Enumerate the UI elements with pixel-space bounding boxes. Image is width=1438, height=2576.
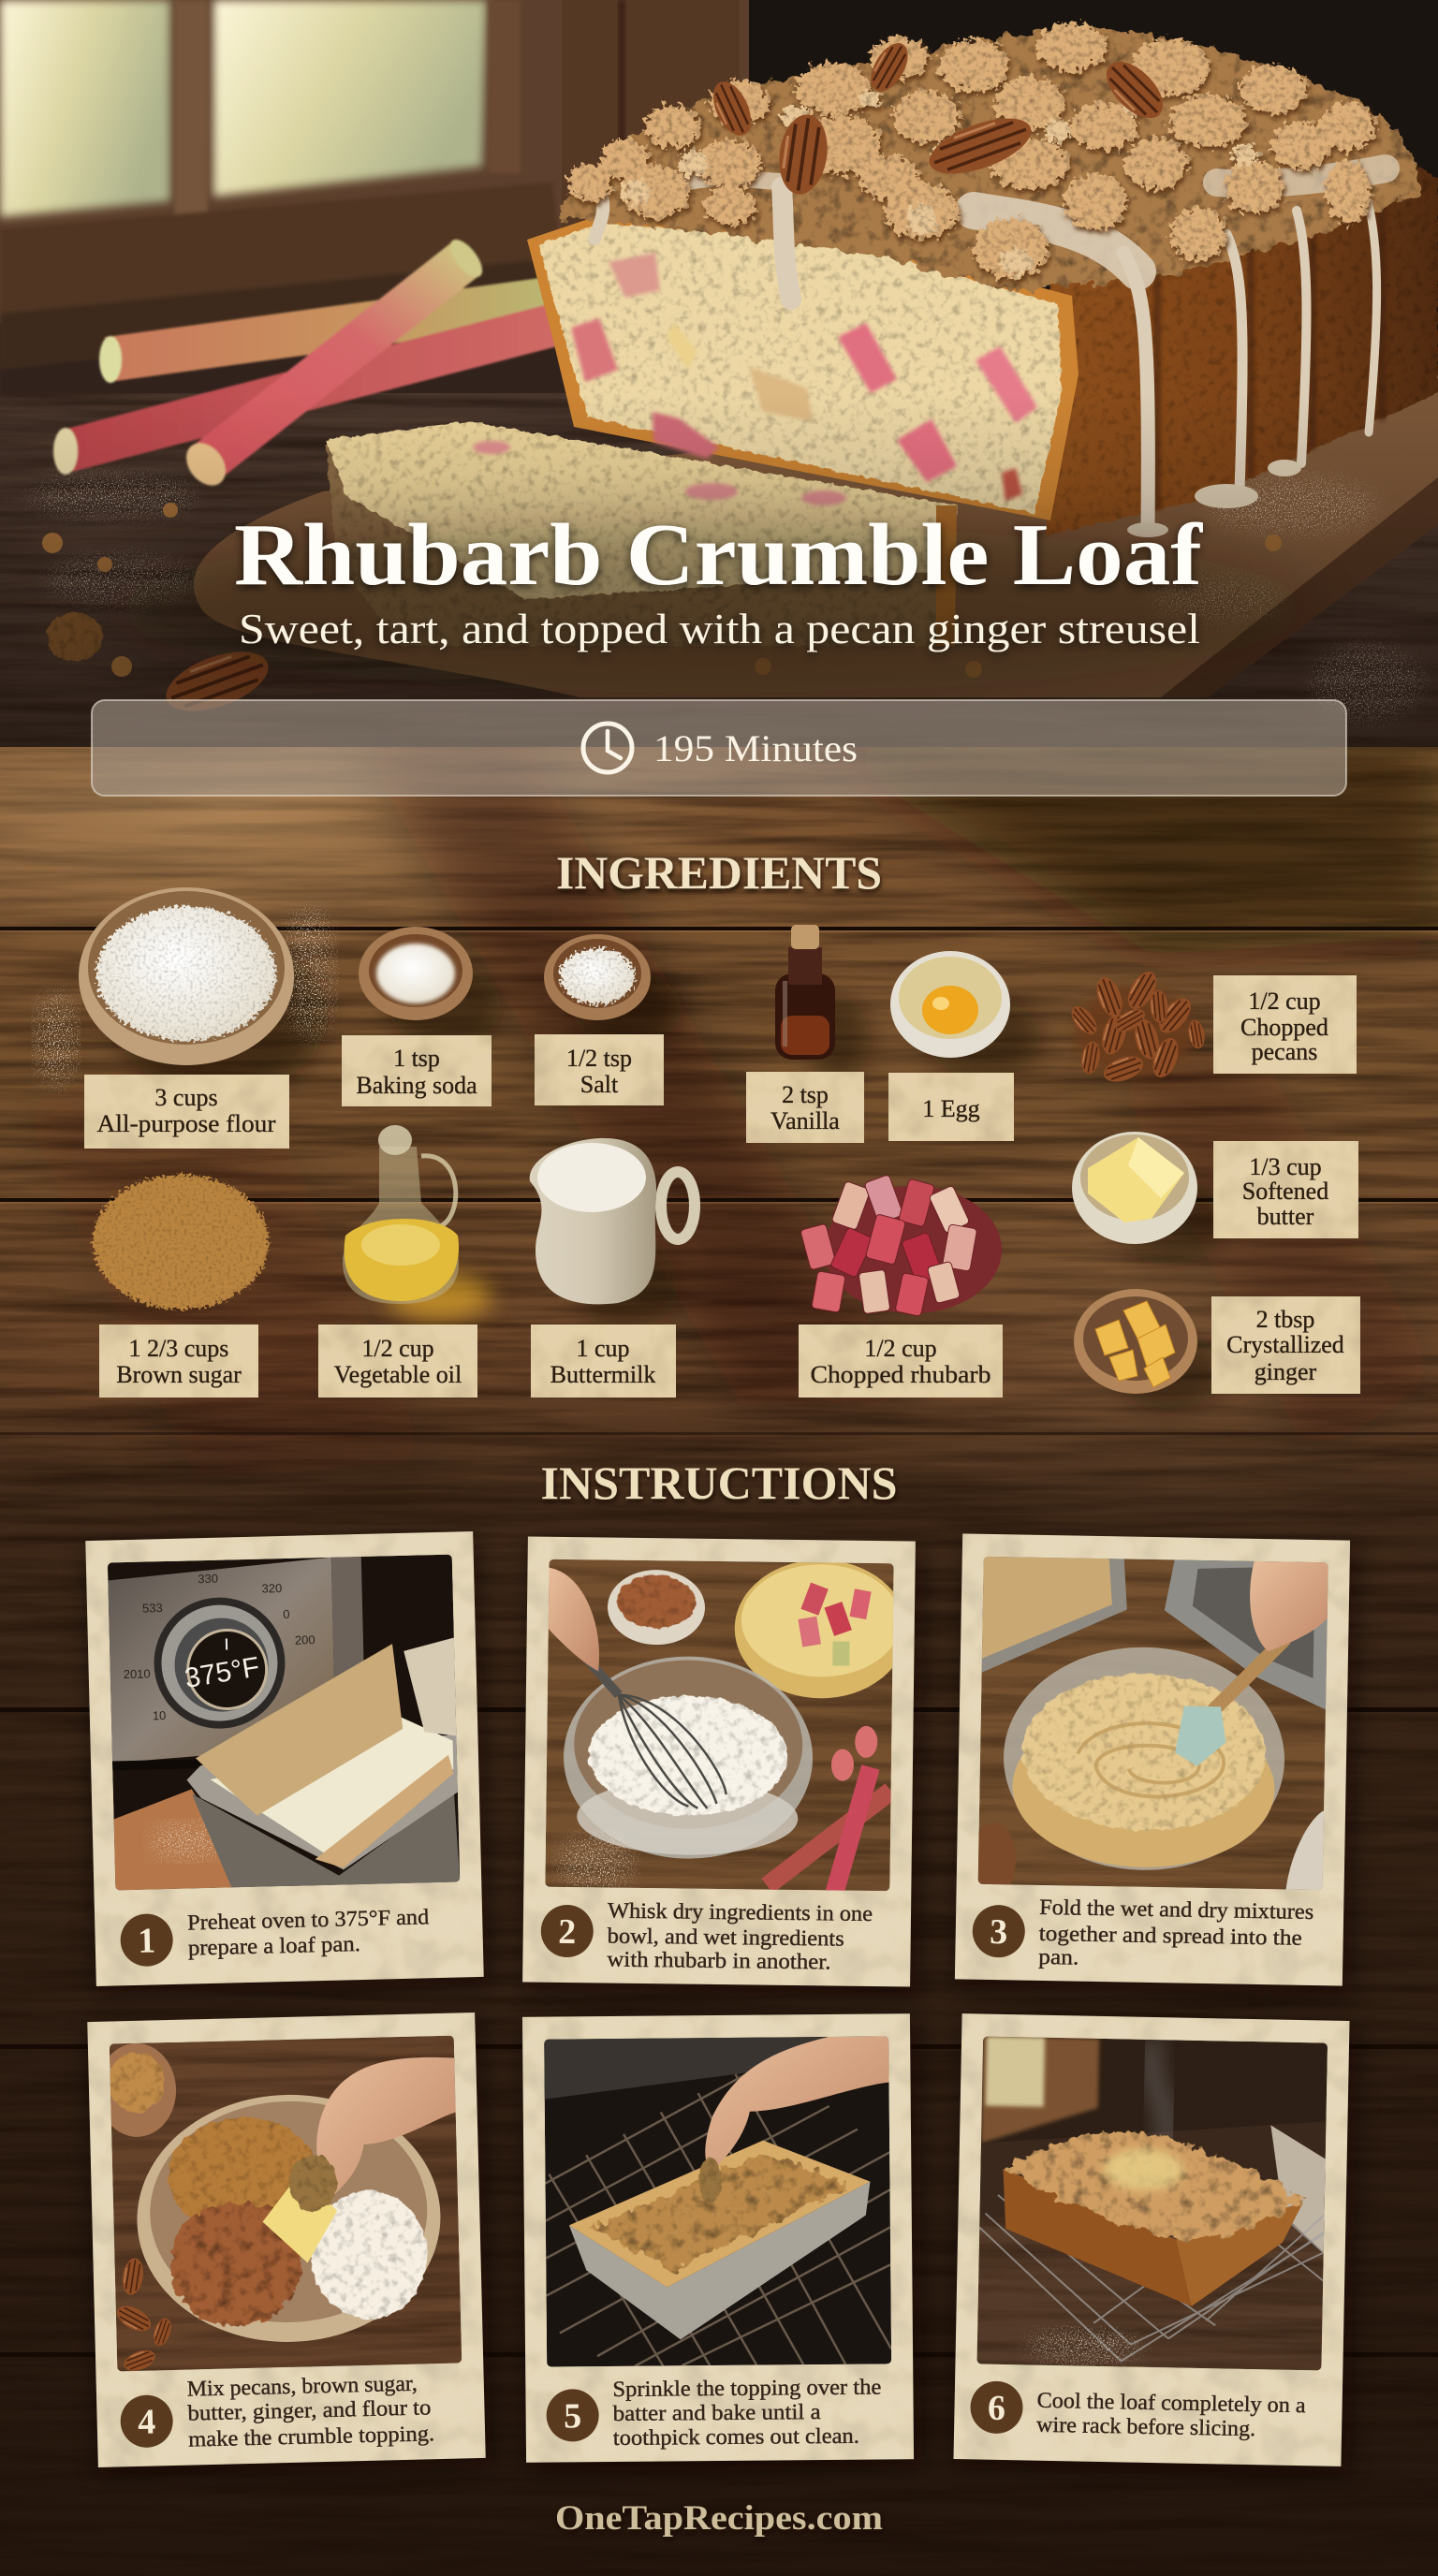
ingredient: egg in a bowl	[890, 951, 1041, 1078]
wood table background	[0, 646, 1438, 2576]
step 5 photo: sprinkling crumble in the oven	[544, 2036, 892, 2367]
step 6 number badge: 6	[988, 2389, 1005, 2428]
loaf side crust	[1047, 159, 1438, 535]
ingredient: buttermilk jug	[530, 1138, 695, 1331]
label: 2 tbsp crystallized ginger	[1211, 1296, 1360, 1394]
label: 1 tsp baking soda: 1 tsp	[393, 1045, 440, 1072]
ingredient: vegetable oil bottle	[343, 1125, 492, 1320]
label: 1/2 cup vegetable oil: 1/2 cup	[361, 1335, 434, 1362]
step 3 number badge	[972, 1905, 1025, 1958]
step 3 photo: folding batter	[970, 1557, 1332, 1903]
ingredient: vanilla bottle	[775, 925, 870, 1081]
label: 1 2/3 cups brown sugar: Brown sugar	[116, 1361, 242, 1388]
label: 1 2/3 cups brown sugar	[99, 1325, 258, 1398]
label: 1/2 tsp salt: 1/2 tsp	[566, 1045, 632, 1072]
step 1 photo: oven dial and lined pan: 200	[295, 1632, 315, 1647]
label: 2 tbsp crystallized ginger: 2 tbsp	[1256, 1306, 1314, 1333]
title: Rhubarb Crumble Loaf	[234, 506, 1204, 604]
table surface	[0, 393, 1438, 749]
step 6 text: wire rack before slicing.	[1036, 2413, 1255, 2441]
pecans on the crumble	[706, 37, 1173, 198]
crumble topping base	[559, 29, 1421, 293]
ingredient: flour bowl	[36, 887, 333, 1095]
label: 1/3 cup softened butter: 1/3 cup	[1249, 1153, 1322, 1180]
label: 2 tsp vanilla	[746, 1072, 864, 1143]
step 1 photo: oven dial and lined pan	[108, 1555, 460, 1890]
step 5 text: batter and bake until a	[613, 2400, 821, 2426]
step 3 text: pan.	[1038, 1945, 1079, 1970]
step 5 number badge: 5	[564, 2396, 581, 2436]
footer website: OneTapRecipes.com	[555, 2499, 883, 2538]
step 1 number badge: 1	[138, 1921, 156, 1961]
instructions heading: INSTRUCTIONS	[541, 1456, 897, 1509]
cut slice	[326, 421, 957, 646]
step 5 text: toothpick comes out clean.	[613, 2424, 859, 2451]
step card 3	[955, 1533, 1358, 1996]
step 2 number badge: 2	[558, 1912, 577, 1952]
label: 1/2 cup chopped pecans: pecans	[1252, 1038, 1317, 1065]
step card 1	[85, 1531, 490, 1996]
label: 1/2 cup chopped pecans: Chopped	[1240, 1014, 1328, 1041]
label: 1/2 cup chopped rhubarb: 1/2 cup	[864, 1335, 937, 1362]
scattered crumbs and pecan	[42, 503, 1282, 723]
label: 1 cup buttermilk: 1 cup	[576, 1335, 630, 1362]
loaf cut face	[527, 215, 1078, 520]
step 1 photo: oven dial and lined pan: 330	[198, 1572, 218, 1586]
step 1 text	[187, 1905, 430, 1961]
crumble lumps	[567, 22, 1376, 278]
hero vignette	[0, 393, 1438, 749]
step 1 number badge	[120, 1913, 173, 1967]
step 4 number badge: 4	[138, 2402, 156, 2442]
label: 1/3 cup softened butter: butter	[1257, 1203, 1314, 1230]
ingredient: baking soda bowl	[359, 927, 501, 1048]
dark wall	[749, 0, 1438, 365]
step 4 text: Mix pecans, brown sugar,	[187, 2372, 418, 2402]
step 2 text: Whisk dry ingredients in one	[608, 1899, 873, 1926]
step 2 number badge	[540, 1905, 594, 1957]
step 2 text	[607, 1899, 873, 1975]
subtitle: Sweet, tart, and topped with a pecan ginger streusel	[239, 605, 1200, 652]
step card 4	[87, 2012, 492, 2477]
label: 1/2 cup vegetable oil: Vegetable oil	[334, 1361, 462, 1388]
label: 1/2 tsp salt	[535, 1034, 664, 1105]
step 4 text: butter, ginger, and flour to	[187, 2395, 432, 2426]
step 1 photo: oven dial and lined pan: 2010	[124, 1666, 151, 1681]
step 2 photo: whisking flour	[545, 1557, 908, 1895]
label: 1 cup buttermilk: Buttermilk	[550, 1361, 655, 1388]
label: 1 tsp baking soda: Baking soda	[356, 1072, 477, 1099]
ingredient: pecan pile	[1066, 967, 1207, 1087]
time pill	[92, 700, 1346, 796]
step 1 photo: oven dial and lined pan: 375°F	[183, 1651, 262, 1694]
icon: clock	[583, 724, 632, 772]
ingredient: chopped rhubarb pile	[800, 1175, 1002, 1316]
step card 5	[522, 2013, 922, 2472]
label: 3 cups all-purpose flour: All-purpose flour	[97, 1110, 276, 1137]
step 6 text	[1036, 2389, 1306, 2442]
label: 1 egg: 1 Egg	[922, 1095, 980, 1122]
ingredient: softened butter bowl	[1072, 1132, 1228, 1265]
step card 2	[522, 1536, 924, 1997]
cook time text: 195 Minutes	[653, 727, 858, 769]
step 2 text: bowl, and wet ingredients	[608, 1925, 844, 1952]
step 1 photo: oven dial and lined pan: 533	[142, 1601, 163, 1616]
step 6 photo: loaf cooling on a rack	[976, 2037, 1328, 2371]
step 1 photo: oven dial and lined pan: 320	[261, 1581, 282, 1596]
label: 1/3 cup softened butter: Softened	[1242, 1178, 1328, 1205]
step 3 number badge: 3	[990, 1912, 1008, 1952]
step 1 photo: oven dial and lined pan: 0	[283, 1607, 290, 1621]
ingredient: crystallized ginger bowl	[1074, 1289, 1225, 1411]
instructions section	[85, 1456, 1358, 2477]
label: 3 cups all-purpose flour: 3 cups	[154, 1084, 218, 1111]
label: 1 egg	[888, 1073, 1014, 1141]
label: 1 tsp baking soda	[342, 1035, 492, 1106]
label: 1/2 cup vegetable oil	[318, 1325, 477, 1398]
label: 3 cups all-purpose flour	[84, 1075, 289, 1149]
label: 1 2/3 cups brown sugar: 1 2/3 cups	[129, 1335, 228, 1362]
glaze drips	[594, 168, 1386, 526]
step 5 number badge	[546, 2389, 599, 2442]
flour dust	[28, 476, 1423, 721]
step 5 text	[612, 2375, 882, 2451]
step 3 text: together and spread into the	[1039, 1922, 1302, 1951]
step 6 text: Cool the loaf completely on a	[1036, 2389, 1306, 2418]
step 4 text: make the crumble topping.	[188, 2422, 434, 2452]
step 1 text: prepare a loaf pan.	[188, 1932, 360, 1961]
ingredients heading: INGREDIENTS	[556, 846, 882, 899]
step 1 photo: oven dial and lined pan: 10	[153, 1708, 166, 1722]
label: 1/3 cup softened butter	[1213, 1141, 1358, 1238]
window sill	[0, 183, 565, 393]
ingredients section	[36, 846, 1360, 1411]
label: 1/2 cup chopped pecans	[1213, 975, 1357, 1074]
window frame	[0, 0, 749, 323]
cutting board	[194, 374, 1438, 697]
rhubarb chunks in the loaf	[571, 253, 1037, 501]
step 3 text: Fold the wet and dry mixtures	[1039, 1895, 1313, 1925]
label: 1/2 tsp salt: Salt	[580, 1071, 619, 1098]
step 6 number badge	[970, 2380, 1023, 2434]
step 5 text: Sprinkle the topping over the	[612, 2375, 882, 2402]
label: 1 cup buttermilk	[531, 1325, 676, 1398]
label: 1/2 cup chopped rhubarb	[799, 1325, 1003, 1398]
ingredient: salt bowl	[544, 934, 682, 1048]
ingredient: brown sugar	[93, 1175, 269, 1310]
hero image: rhubarb crumble loaf on a board	[0, 0, 1438, 749]
rhubarb stalks	[53, 234, 562, 493]
label: 2 tsp vanilla: 2 tsp	[782, 1081, 829, 1108]
step 2 text: with rhubarb in another.	[607, 1948, 831, 1974]
label: 2 tbsp crystallized ginger: Crystallized	[1226, 1331, 1344, 1358]
label: 1/2 cup chopped rhubarb: Chopped rhubarb	[811, 1361, 990, 1388]
step card 6	[953, 2013, 1358, 2476]
step 4 text	[187, 2371, 434, 2452]
step 1 text: Preheat oven to 375°F and	[187, 1905, 430, 1936]
label: 2 tbsp crystallized ginger: ginger	[1255, 1358, 1317, 1385]
step 3 text	[1038, 1895, 1313, 1974]
label: 2 tsp vanilla: Vanilla	[770, 1107, 840, 1134]
step 4 number badge	[120, 2394, 173, 2448]
label: 1/2 cup chopped pecans: 1/2 cup	[1248, 988, 1321, 1015]
glaze puddles	[1127, 460, 1301, 537]
step 4 photo: mixing crumble topping	[96, 2036, 462, 2376]
